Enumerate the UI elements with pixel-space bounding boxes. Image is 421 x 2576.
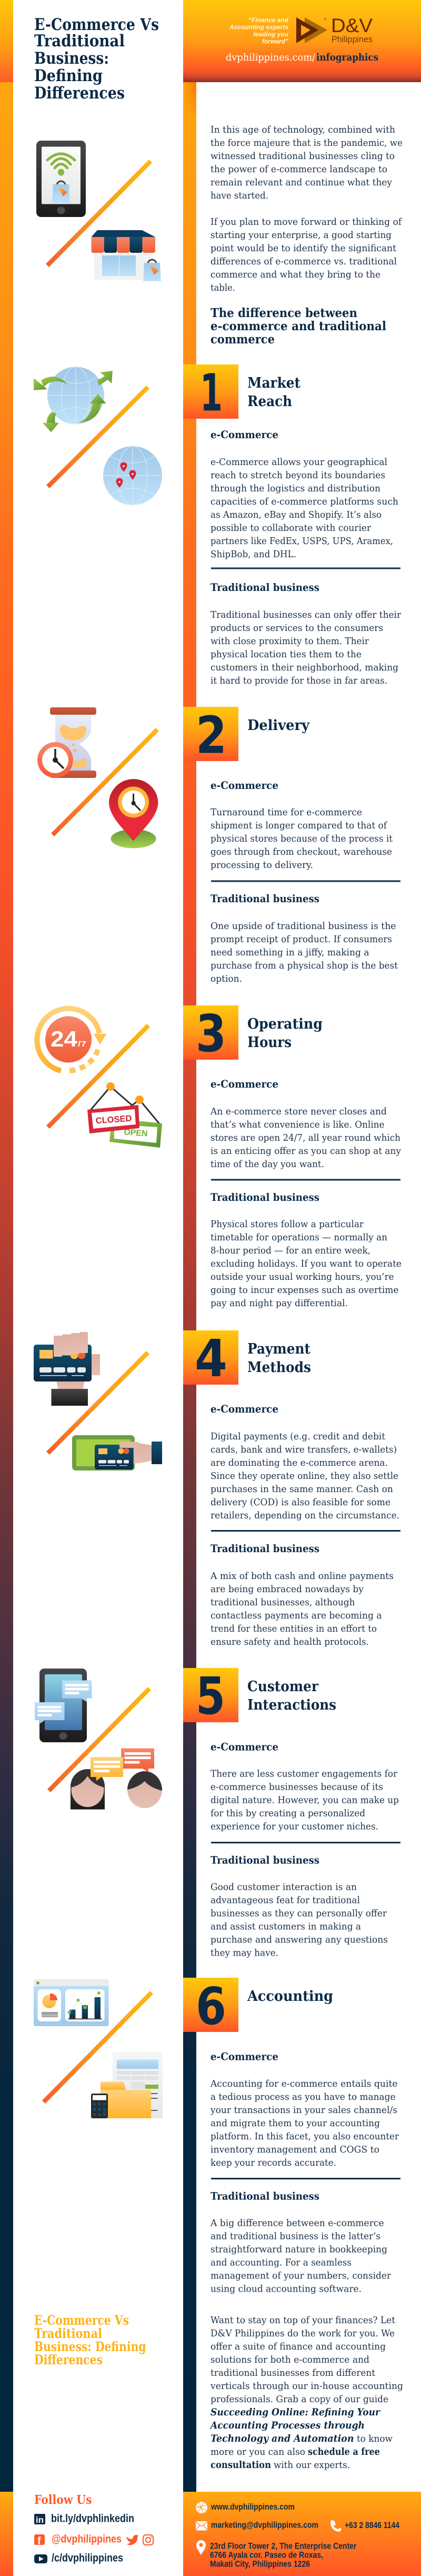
section 2 e-commerce text: Turnaround time for e-commerce bbox=[210, 807, 362, 818]
intro subheading: The difference between bbox=[210, 306, 357, 320]
number box 6 bbox=[183, 1977, 238, 2036]
section 3 e-commerce text: stores are open 24/7, all year round which bbox=[210, 1132, 400, 1143]
section 1 e-commerce text: through the logistics and distribution bbox=[210, 483, 380, 494]
number box 1 bbox=[183, 363, 238, 422]
website url: infographics bbox=[316, 52, 378, 63]
section 6 e-commerce text: your transactions in your sales channel/s bbox=[210, 2105, 397, 2116]
section 2 e-commerce text: physical stores because of the process it bbox=[210, 833, 393, 844]
icon: two people talking bbox=[71, 1749, 162, 1810]
icon: open and closed signs: OPEN bbox=[124, 1128, 148, 1139]
section heading: Customer Interactions: Interactions bbox=[247, 1697, 336, 1713]
intro text: witnessed traditional businesses cling to bbox=[210, 151, 395, 162]
section 4 e-commerce text: delivery (COD) is also feasible for some bbox=[210, 1497, 390, 1508]
diagonal divider bbox=[47, 161, 151, 265]
closing call to action: Accounting Processes through bbox=[209, 2420, 365, 2431]
closing title: E-Commerce Vs bbox=[34, 2313, 129, 2328]
section 6 e-commerce text: inventory management and COGS to bbox=[210, 2144, 379, 2155]
number box 5 bbox=[183, 1666, 238, 1726]
section 2 e-commerce text bbox=[210, 779, 393, 871]
closing call to action: traditional businesses from different bbox=[210, 2367, 376, 2378]
section 1 traditional text: Traditional businesses can only offer their bbox=[210, 609, 401, 620]
section 6 traditional text: management of your numbers, consider bbox=[210, 2270, 391, 2282]
diagonal divider bbox=[49, 1689, 149, 1791]
intro text: In this age of technology, combined with bbox=[210, 124, 395, 135]
intro text: table. bbox=[210, 282, 235, 293]
illustration: always open vs closed sign bbox=[37, 1009, 162, 1148]
closing call to action: to know bbox=[357, 2433, 393, 2444]
section heading: Operating Hours: Operating bbox=[247, 1016, 323, 1032]
closing call to action: Technology and Automation bbox=[210, 2433, 354, 2444]
diagonal divider bbox=[48, 1025, 148, 1127]
logo: D&V Philippines: D&V bbox=[331, 15, 373, 36]
section 2 traditional text: prompt receipt of product. If consumers bbox=[210, 934, 392, 945]
social: youtube bbox=[34, 2551, 123, 2564]
section 2 traditional text: need something in a jiffy, making a bbox=[210, 947, 369, 958]
section 6 e-commerce text: Accounting for e-commerce entails quite bbox=[210, 2078, 398, 2089]
section 4 traditional text: contactless payments are becoming a bbox=[210, 1610, 382, 1621]
section 1 e-commerce text: partners like FedEx, USPS, UPS, Aramex, bbox=[210, 536, 393, 547]
section 3 e-commerce text: is an enticing offer as you can shop at any bbox=[210, 1146, 402, 1157]
illustration: card vs cash bbox=[34, 1332, 162, 1470]
section 1 e-commerce text: reach to stretch beyond its boundaries bbox=[210, 470, 385, 481]
icon: hand holding card bbox=[34, 1332, 100, 1406]
section 6 traditional text: and traditional business is the latter’s bbox=[210, 2231, 380, 2242]
section 5 traditional text: purchase and answering any questions bbox=[210, 1934, 388, 1946]
social: linkedin: in bbox=[36, 2515, 44, 2525]
section 2 e-commerce text: processing to delivery. bbox=[210, 860, 313, 871]
section 3 traditional text: Traditional business bbox=[210, 1191, 319, 1203]
main title: Defining bbox=[34, 66, 103, 85]
icon: phone with chat bubbles bbox=[35, 1669, 92, 1742]
section heading: Operating Hours: Hours bbox=[247, 1034, 292, 1051]
diagonal divider bbox=[48, 387, 148, 487]
follow us heading: Follow Us bbox=[34, 2493, 92, 2507]
section 1 e-commerce text: capacities of e-commerce platforms such bbox=[210, 496, 398, 507]
section 6 traditional text: and accounting. For a seamless bbox=[210, 2257, 352, 2268]
section 4 e-commerce text bbox=[210, 1403, 399, 1521]
section 4 traditional text: trend for these entities in an effort to bbox=[210, 1623, 377, 1634]
main title: Traditional bbox=[34, 32, 125, 51]
section 1 traditional text bbox=[210, 581, 401, 686]
footer contact panel bbox=[183, 2492, 421, 2576]
section 5 e-commerce text: experience for your customer niches. bbox=[210, 1821, 378, 1832]
section 3 traditional text bbox=[210, 1191, 402, 1309]
icon: hand holding cash and card bbox=[72, 1435, 162, 1470]
contact: address: 23rd Floor Tower 2, The Enterprise Center bbox=[210, 2542, 357, 2551]
contact: website: www.dvphilippines.com bbox=[210, 2502, 295, 2512]
section heading: Customer Interactions bbox=[247, 1679, 336, 1713]
closing call to action: solutions for both e-commerce and bbox=[210, 2354, 369, 2365]
number box 6: 6 bbox=[196, 1977, 226, 2036]
illustration: phone vs store bbox=[36, 141, 161, 281]
main title: Differences bbox=[34, 84, 125, 103]
section 5 e-commerce text: There are less customer engagements for bbox=[210, 1769, 397, 1779]
icon: 24/7 clock: 24 bbox=[51, 1027, 78, 1051]
section 1 e-commerce text: ShipBob, and DHL. bbox=[210, 549, 296, 560]
section 6 traditional text: using cloud accounting software. bbox=[210, 2284, 362, 2294]
section 5 traditional text: they may have. bbox=[210, 1948, 278, 1958]
section 6 traditional text: A big difference between e-commerce bbox=[210, 2217, 384, 2229]
closing call to action: Want to stay on top of your finances? Let bbox=[210, 2315, 396, 2326]
section 4 e-commerce text: Since they operate online, they also settle bbox=[210, 1470, 398, 1482]
section 5 e-commerce text bbox=[210, 1741, 399, 1832]
contact: address: 6766 Ayala cor. Paseo de Roxas, bbox=[210, 2550, 323, 2560]
icon: ledger, folder and calculator bbox=[91, 2052, 163, 2118]
section 4 e-commerce text: are dominating the e-commerce arena. bbox=[210, 1457, 388, 1468]
closing call to action: Succeeding Online: Refining Your bbox=[210, 2407, 380, 2418]
section heading: Market Reach: Reach bbox=[247, 393, 292, 410]
section 3 traditional text: outside your usual working hours, you’re bbox=[210, 1271, 394, 1282]
diagonal divider bbox=[44, 1992, 152, 2102]
main title: E-Commerce Vs bbox=[34, 15, 159, 34]
section heading: Payment Methods: Methods bbox=[247, 1359, 311, 1376]
intro text: have started. bbox=[210, 190, 268, 201]
contact: website bbox=[196, 2502, 295, 2513]
section 6 e-commerce text: a tedious process as you have to manage bbox=[210, 2091, 396, 2103]
intro text: the power of e-commerce landscape to bbox=[210, 164, 387, 175]
icon: smartphone with wifi bbox=[36, 141, 86, 217]
section 3 traditional text: timetable for operations — normally an bbox=[210, 1232, 387, 1243]
logo: D&V Philippines bbox=[296, 15, 373, 44]
closing call to action: professionals. Grab a copy of our guide bbox=[210, 2394, 388, 2405]
section 5 traditional text: Traditional business bbox=[210, 1854, 319, 1867]
section 3 e-commerce text: e-Commerce bbox=[210, 1078, 278, 1090]
closing call to action: D&V Philippines do the work for you. We bbox=[210, 2328, 395, 2339]
icon: storefront with bag bbox=[92, 230, 161, 281]
intro subheading: e-commerce and traditional bbox=[210, 319, 386, 333]
section 4 traditional text: traditional businesses, although bbox=[210, 1597, 355, 1608]
social: linkedin: bit.ly/dvphlinkedin bbox=[51, 2512, 134, 2525]
section 1 traditional text: products or services to the consumers bbox=[210, 623, 383, 634]
section 1 traditional text: it hard to provide for those in far areas. bbox=[210, 675, 387, 686]
tagline: “Finance and bbox=[248, 16, 289, 24]
section 3 e-commerce text: time of the day you want. bbox=[210, 1159, 324, 1170]
section 6 e-commerce text: and migrate them to your accounting bbox=[210, 2118, 380, 2129]
section heading: Payment Methods bbox=[247, 1341, 311, 1376]
section 5 traditional text: and assist customers in making a bbox=[210, 1921, 361, 1932]
section 3 traditional text: Physical stores follow a particular bbox=[210, 1219, 364, 1230]
section 6 traditional text: Traditional business bbox=[210, 2190, 319, 2203]
section 4 traditional text: ensure safety and health protocols. bbox=[210, 1636, 369, 1647]
section 4 e-commerce text: Digital payments (e.g. credit and debit bbox=[210, 1431, 386, 1442]
closing call to action: verticals through our in-house accounting bbox=[210, 2381, 403, 2392]
icon: open and closed signs: CLOSED bbox=[95, 1114, 132, 1126]
section 4 e-commerce text: retailers, depending on the circumstance. bbox=[210, 1510, 399, 1521]
section 5 e-commerce text: digital nature. However, you can make up bbox=[210, 1795, 399, 1805]
section heading: Market Reach: Market bbox=[247, 375, 300, 391]
section 2 traditional text bbox=[210, 893, 398, 984]
intro text: commerce and what they bring to the bbox=[210, 269, 380, 280]
closing call to action bbox=[209, 2315, 403, 2471]
section 4 traditional text: Traditional business bbox=[210, 1543, 319, 1555]
main title bbox=[34, 15, 159, 103]
tagline bbox=[229, 16, 289, 45]
section 5 traditional text: Good customer interaction is an bbox=[210, 1881, 357, 1893]
closing title: Traditional bbox=[34, 2326, 102, 2341]
section 1 e-commerce text: possible to collaborate with courier bbox=[210, 522, 371, 534]
intro text: If you plan to move forward or thinking of bbox=[210, 216, 402, 228]
section 1 e-commerce text: e-Commerce bbox=[210, 429, 278, 441]
section 5 e-commerce text: e-commerce businesses because of its bbox=[210, 1781, 383, 1793]
icon: analytics dashboard bbox=[34, 1979, 109, 2026]
section 4 traditional text: are being embraced nowadays by bbox=[210, 1584, 364, 1595]
section heading: Operating Hours bbox=[247, 1016, 323, 1051]
icon: hourglass with clock bbox=[37, 707, 96, 778]
header panel bbox=[183, 0, 421, 82]
intro text: point would be to identify the significant bbox=[210, 243, 397, 254]
illustration: dashboard vs paperwork bbox=[34, 1979, 163, 2118]
section 6 traditional text bbox=[210, 2190, 391, 2294]
closing call to action: consultation bbox=[210, 2460, 271, 2471]
number box 2: 2 bbox=[196, 706, 227, 765]
section 3 traditional text: pay and night pay differential. bbox=[210, 1298, 348, 1309]
section 1 e-commerce text: as Amazon, eBay and Shopify. It’s also bbox=[210, 509, 382, 520]
closing title bbox=[34, 2313, 146, 2367]
section 2 e-commerce text: goes through from checkout, warehouse bbox=[210, 846, 392, 857]
closing call to action: more or you can also bbox=[210, 2446, 305, 2457]
section 2 traditional text: Traditional business bbox=[210, 893, 319, 905]
illustration: global reach vs local pins bbox=[34, 367, 162, 505]
closing call to action: schedule a free bbox=[308, 2446, 380, 2457]
section 2 traditional text: option. bbox=[210, 973, 242, 984]
section 3 e-commerce text: that’s what convenience is like. Online bbox=[210, 1119, 384, 1130]
icon: open and closed signs bbox=[87, 1082, 162, 1148]
section 3 traditional text: 8-hour period — for an entire week, bbox=[210, 1245, 370, 1256]
section heading: Payment Methods: Payment bbox=[247, 1341, 310, 1357]
section 3 e-commerce text: An e-commerce store never closes and bbox=[210, 1106, 387, 1117]
diagonal divider bbox=[53, 729, 157, 835]
intro text: the force majeure that is the pandemic, we bbox=[210, 137, 403, 149]
social: facebook twitter instagram bbox=[34, 2532, 153, 2547]
tagline: Accounting experts bbox=[229, 23, 288, 31]
contact: address bbox=[196, 2540, 357, 2569]
main title: Business: bbox=[34, 49, 109, 68]
number box 4 bbox=[183, 1329, 238, 1388]
section 1 traditional text: customers in their neighborhood, making bbox=[210, 662, 398, 673]
number box 1: 1 bbox=[200, 363, 223, 422]
contact: address: Makati City, Philippines 1226 bbox=[210, 2560, 310, 2569]
intro subheading bbox=[210, 306, 386, 347]
website url bbox=[226, 52, 378, 63]
section 2 traditional text: purchase from a physical shop is the best bbox=[210, 960, 398, 971]
section 1 e-commerce text bbox=[210, 429, 398, 560]
number box 5: 5 bbox=[196, 1666, 225, 1726]
section 1 traditional text: physical location ties them to the bbox=[210, 649, 362, 660]
section 2 traditional text: One upside of traditional business is the bbox=[210, 921, 396, 932]
section 4 e-commerce text: e-Commerce bbox=[210, 1403, 278, 1415]
section 4 traditional text: A mix of both cash and online payments bbox=[210, 1571, 394, 1582]
left gradient strip bbox=[0, 0, 13, 2576]
center gradient strip bbox=[183, 82, 196, 2492]
section 5 traditional text: advantageous feat for traditional bbox=[210, 1895, 360, 1906]
intro subheading: commerce bbox=[210, 332, 275, 347]
social: facebook twitter instagram: f bbox=[37, 2535, 41, 2547]
number box 3 bbox=[183, 1004, 238, 1063]
section 6 e-commerce text: keep your records accurate. bbox=[210, 2157, 336, 2168]
diagonal divider bbox=[48, 1353, 148, 1453]
intro text: differences of e-commerce vs. traditional bbox=[210, 256, 397, 267]
illustration: slow vs quick delivery bbox=[37, 707, 158, 848]
intro text: remain relevant and continue what they bbox=[210, 177, 393, 188]
icon: globe with arrows bbox=[34, 367, 113, 432]
section heading: Market Reach bbox=[247, 375, 300, 410]
contact: phone: +63 2 8846 1144 bbox=[345, 2521, 400, 2530]
icon: globe with location pins bbox=[103, 446, 162, 505]
section 4 e-commerce text: cards, bank and wire transfers, e-wallets) bbox=[210, 1444, 397, 1455]
closing call to action: offer a suite of finance and accounting bbox=[210, 2341, 386, 2352]
section heading: Customer Interactions: Customer bbox=[247, 1679, 319, 1695]
section 6 traditional text: straightforward nature in bookkeeping bbox=[210, 2244, 387, 2255]
section 4 traditional text bbox=[210, 1543, 394, 1647]
closing call to action: with our experts. bbox=[274, 2460, 350, 2471]
section 6 e-commerce text: platform. In this facet, you also encounter bbox=[210, 2131, 399, 2142]
section 3 traditional text: excluding holidays. If you want to operate bbox=[210, 1258, 402, 1269]
section heading: Accounting: Accounting bbox=[247, 1988, 333, 2005]
website url: dvphilippines.com/ bbox=[226, 52, 316, 63]
social: facebook twitter instagram: @dvphilippines bbox=[52, 2532, 122, 2545]
closing title: Differences bbox=[34, 2352, 103, 2367]
section 5 traditional text: businesses as they can personally offer bbox=[210, 1908, 387, 1919]
number box 4: 4 bbox=[195, 1329, 227, 1388]
section 5 e-commerce text: e-Commerce bbox=[210, 1741, 278, 1753]
section 3 e-commerce text bbox=[210, 1078, 402, 1170]
section heading: Delivery: Delivery bbox=[247, 717, 310, 734]
contact: phone bbox=[330, 2520, 400, 2532]
section 1 e-commerce text: e-Commerce allows your geographical bbox=[210, 457, 387, 468]
section 1 traditional text: with close proximity to them. Their bbox=[210, 636, 369, 647]
logo: D&V Philippines: Philippines bbox=[332, 34, 373, 44]
section 2 e-commerce text: shipment is longer compared to that of bbox=[210, 820, 387, 831]
closing title: Business: Defining bbox=[34, 2339, 146, 2354]
section 4 e-commerce text: purchases in the same manner. Cash on bbox=[210, 1484, 393, 1495]
section 2 e-commerce text: e-Commerce bbox=[210, 779, 278, 792]
icon: 24/7 clock bbox=[37, 1009, 106, 1071]
section 3 traditional text: going to incur expenses such as overtime bbox=[210, 1285, 399, 1296]
section 6 e-commerce text bbox=[210, 2051, 399, 2168]
section 6 e-commerce text: e-Commerce bbox=[210, 2051, 278, 2062]
illustration: chat vs face to face bbox=[35, 1669, 162, 1810]
number box 2 bbox=[183, 706, 238, 765]
tagline: leading you bbox=[253, 31, 289, 38]
logo: D&V Philippines: ® bbox=[324, 18, 327, 22]
section 1 traditional text: Traditional business bbox=[210, 581, 319, 594]
icon: 24/7 clock: /7 bbox=[78, 1040, 86, 1049]
tagline: forward” bbox=[262, 38, 288, 45]
section 5 e-commerce text: for this by creating a personalized bbox=[210, 1808, 365, 1819]
intro text: starting your enterprise, a good starting bbox=[210, 230, 392, 241]
number box 3: 3 bbox=[196, 1004, 226, 1063]
section 5 traditional text bbox=[210, 1854, 388, 1958]
intro text bbox=[210, 124, 403, 293]
icon: map pin with clock bbox=[109, 779, 158, 848]
social: youtube: /c/dvphilippines bbox=[52, 2551, 123, 2564]
contact: email: marketing@dvphilippines.com bbox=[211, 2521, 318, 2530]
